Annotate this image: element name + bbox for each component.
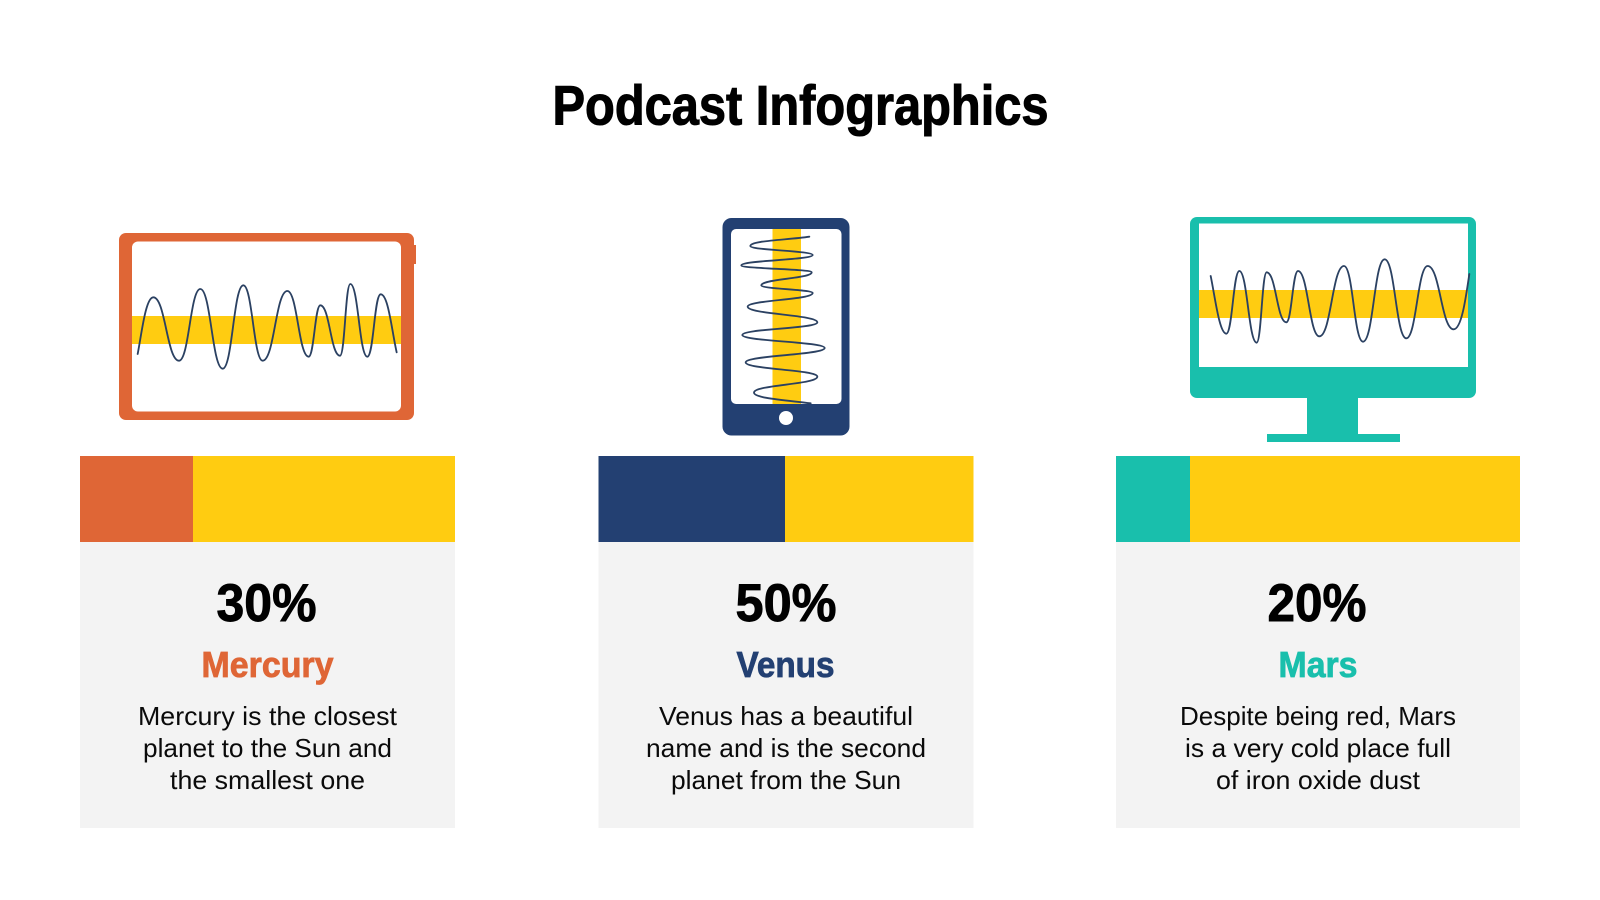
progress bar: Mercury 30%: [80, 456, 455, 542]
description: Venus: Venus has a beautiful: [659, 701, 913, 731]
description: Venus: planet from the Sun: [671, 765, 901, 795]
description: Mercury: [138, 701, 398, 795]
progress bar: Venus 50%: [598, 456, 974, 542]
description: Mars: is a very cold place full: [1185, 733, 1451, 763]
icon: smartphone with sound wave: [722, 218, 850, 436]
icon: tablet with sound wave: [119, 233, 416, 420]
name: Mercury: Mercury: [202, 644, 334, 685]
description: Mercury: planet to the Sun and: [143, 733, 392, 763]
icon: desktop monitor with sound wave: [1190, 217, 1476, 442]
panel: Mars: [1116, 456, 1520, 828]
panel: Mercury: [80, 456, 455, 828]
description: Venus: [646, 701, 926, 795]
name: Venus: Venus: [736, 644, 834, 685]
name: Mars: Mars: [1278, 644, 1358, 685]
description: Mars: Despite being red, Mars: [1180, 701, 1456, 731]
percentage: Mercury: 30%: [216, 574, 316, 633]
description: Mars: [1180, 701, 1456, 795]
panel: Venus: [598, 456, 974, 828]
percentage: Venus: 50%: [736, 574, 836, 633]
percentage: Mars: 20%: [1268, 574, 1366, 633]
progress bar: Mars 20%: [1116, 456, 1520, 542]
description: Mercury: Mercury is the closest: [138, 701, 398, 731]
description: Mars: of iron oxide dust: [1216, 765, 1421, 795]
description: Mercury: the smallest one: [170, 765, 365, 795]
description: Venus: name and is the second: [646, 733, 926, 763]
title: Podcast Infographics: [552, 74, 1048, 136]
